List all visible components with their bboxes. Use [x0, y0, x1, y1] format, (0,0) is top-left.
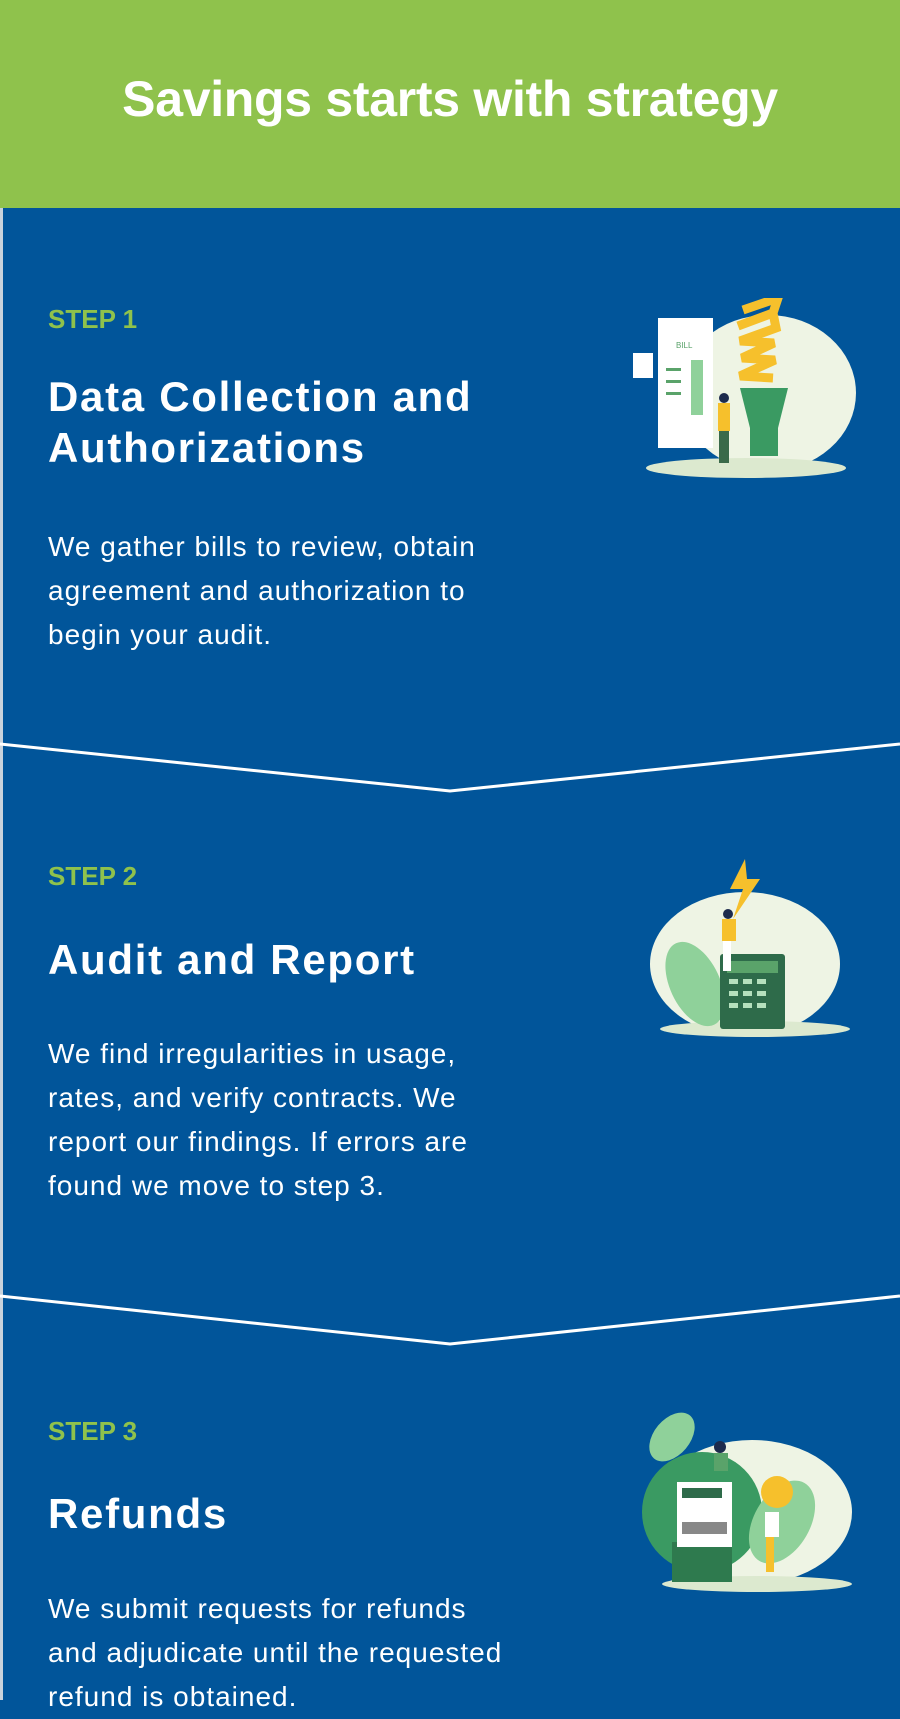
step 2 heading: Audit and Report [48, 936, 416, 983]
header banner [0, 0, 900, 208]
step 2 text: found we move to step 3. [48, 1170, 385, 1201]
step 3 text: and adjudicate until the requested [48, 1637, 502, 1668]
icon: bill and light bulb: BILL [676, 341, 693, 350]
step 2 text: rates, and verify contracts. We [48, 1082, 457, 1113]
step 2 text: report our findings. If errors are [48, 1126, 468, 1157]
panel: step 3 [48, 1412, 852, 1712]
icon: calculator with lightning [650, 859, 850, 1037]
step 3 text: We submit requests for refunds [48, 1593, 467, 1624]
step 1 text [48, 531, 476, 650]
step 3 text [48, 1593, 502, 1712]
step 3 label: STEP 3 [48, 1416, 137, 1446]
step 1 text: We gather bills to review, obtain [48, 531, 476, 562]
step 1 heading: Authorizations [48, 424, 366, 471]
step 1 heading: Data Collection and [48, 373, 472, 420]
step 2 label: STEP 2 [48, 861, 137, 891]
step 3 text: refund is obtained. [48, 1681, 297, 1712]
step 1 text: begin your audit. [48, 619, 272, 650]
icon: meter with coin [642, 1412, 852, 1592]
icon: bill and light bulb [633, 298, 856, 478]
step 3 heading: Refunds [48, 1490, 228, 1537]
panel: step 1 [48, 298, 856, 650]
step 1 label: STEP 1 [48, 304, 137, 334]
panel: step 2 [48, 859, 850, 1201]
step 2 text: We find irregularities in usage, [48, 1038, 456, 1069]
step 2 text [48, 1038, 468, 1201]
step 1 text: agreement and authorization to [48, 575, 466, 606]
title: Savings starts with strategy [122, 71, 778, 127]
step 1 heading [48, 373, 472, 471]
